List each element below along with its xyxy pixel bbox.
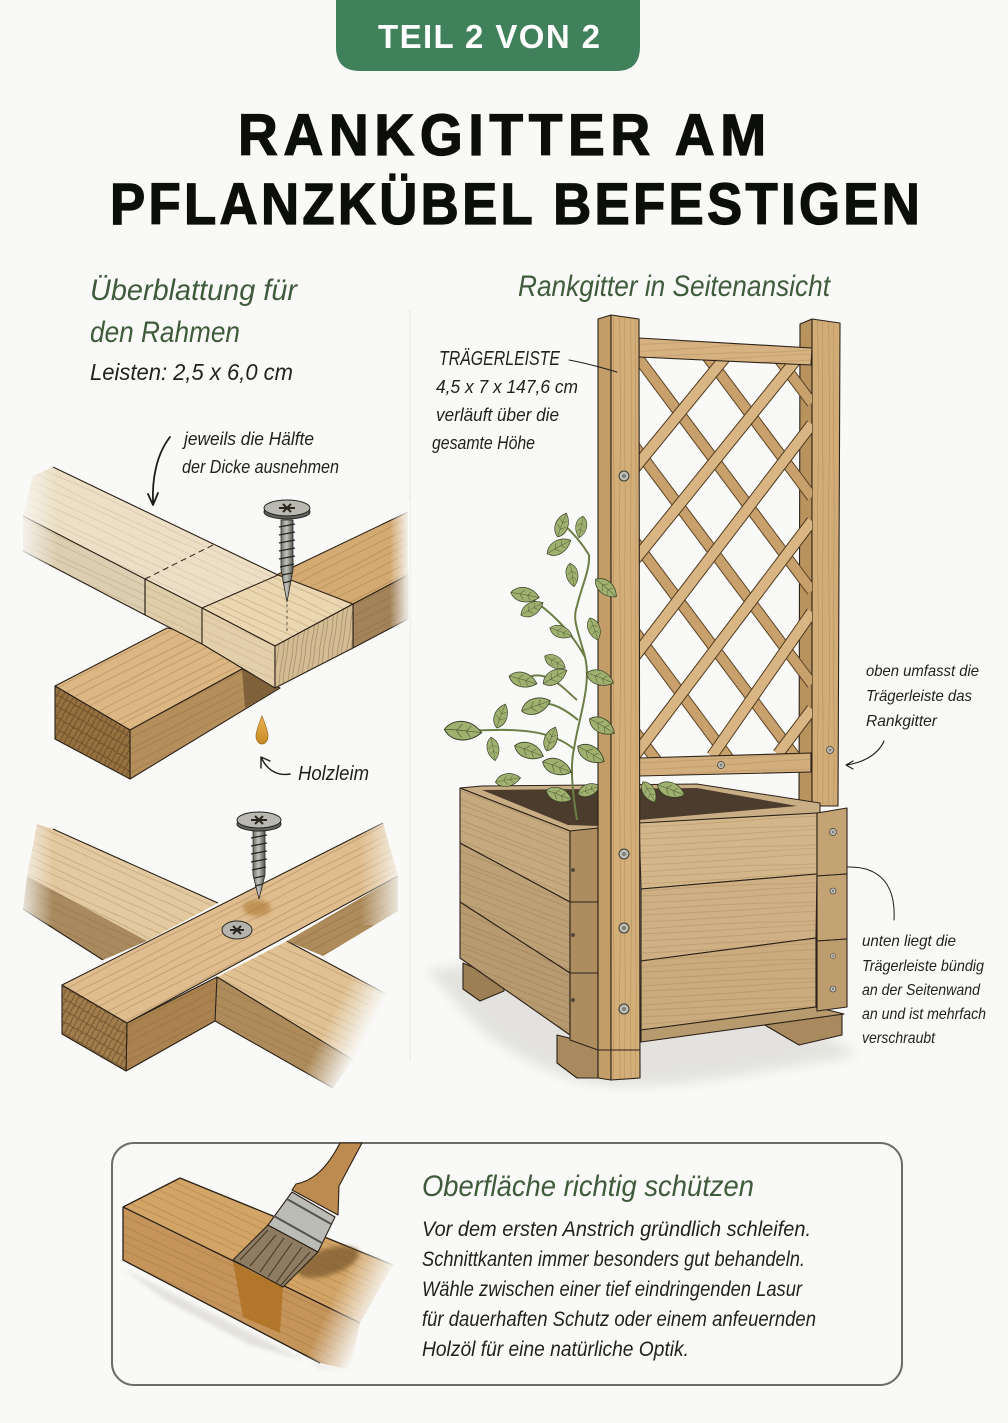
planter front boards [639, 813, 844, 1042]
rim and soil [460, 784, 820, 831]
label: Holzleim: Holzleim [298, 763, 369, 785]
label: unten liegt: an der Seitenwand [862, 982, 981, 999]
panel: surface protection [112, 1143, 902, 1385]
glue drop [256, 716, 268, 744]
brush ferrule [268, 1192, 335, 1252]
badge: Teil 2 von 2 [336, 0, 640, 71]
label: unten liegt [862, 933, 986, 1047]
heading: Rankgitter in Seitenansicht: Rankgitter in Seitenansicht [518, 270, 831, 303]
label: unten liegt: unten liegt die [862, 933, 956, 950]
planter left side [460, 788, 570, 1035]
heading: Überblattung für den Rahmen [90, 274, 298, 349]
planter corner [570, 828, 598, 1050]
label: oben umfasst [866, 663, 979, 730]
text: surface instructions: für dauerhaften Schutz oder einem anfeuernden [422, 1308, 816, 1331]
panel divider [409, 310, 411, 1060]
lower beam [55, 512, 408, 779]
label: unten liegt: an und ist mehrfach [862, 1006, 986, 1023]
beam [123, 1178, 393, 1370]
upper beam with notch [23, 467, 353, 688]
lower right beam [215, 941, 390, 1088]
illustration: planter with trellis [425, 315, 860, 1086]
label: half thickness: jeweils die Hälfte [181, 429, 314, 449]
text: surface instructions [422, 1218, 816, 1361]
label: unten liegt: verschraubt [862, 1030, 935, 1047]
brush shadow [294, 1240, 362, 1284]
arrow: to glue [261, 757, 290, 774]
screw above joint [237, 812, 281, 899]
label: oben umfasst: Trägerleiste das [866, 688, 972, 705]
label: Trägerleiste: TRÄGERLEISTE [439, 348, 561, 370]
heading: Oberfläche richtig schützen: Oberfläche richtig schützen [422, 1170, 754, 1203]
back beam [23, 824, 218, 960]
label: half thickness: der Dicke ausnehmen [182, 457, 339, 477]
end fades [15, 815, 53, 925]
illustration: wood beam with brush [122, 1143, 393, 1372]
arrow: to half-lap notch [148, 437, 170, 505]
right post behind planter [799, 319, 840, 806]
label: Trägerleiste: 4,5 x 7 x 147,6 cm [436, 377, 578, 397]
oil stain [233, 1262, 283, 1333]
lattice [640, 358, 812, 758]
countersunk screw head [222, 921, 252, 939]
title [110, 103, 920, 237]
ground shadow [425, 960, 860, 1086]
label: unten liegt: Trägerleiste bündig [862, 958, 984, 975]
leaves in front of post [574, 574, 621, 768]
label: oben umfasst: oben umfasst die [866, 663, 979, 680]
cross beam [62, 823, 398, 1071]
plant [444, 511, 687, 820]
brush bristles [233, 1225, 318, 1287]
label: Trägerleiste: gesamte Höhe [432, 433, 535, 453]
title: RANKGITTER AM [238, 103, 766, 167]
arrow: leader to lower fastening [847, 867, 894, 920]
text: Leisten dimensions: Leisten: 2,5 x 6,0 cm [90, 359, 293, 385]
text: surface instructions: Holzöl für eine natürliche Optik. [422, 1338, 689, 1361]
heading: Überblattung für den Rahmen: den Rahmen [90, 316, 240, 349]
planter feet [463, 963, 842, 1078]
label: oben umfasst: Rankgitter [866, 713, 938, 730]
left post [598, 315, 640, 1080]
table shadow [122, 1268, 345, 1372]
label: Trägerleiste [432, 348, 578, 453]
bottom rail [639, 753, 811, 776]
planter right corner [817, 808, 847, 1011]
end fades [15, 455, 57, 565]
arrow: to upper fastening [846, 741, 884, 769]
brush handle [292, 1143, 362, 1215]
heading: Überblattung für den Rahmen: Überblattung für [90, 274, 298, 307]
badge: Teil 2 von 2: TEIL 2 VON 2 [378, 18, 600, 55]
top rail [639, 338, 812, 365]
label: half thickness [181, 429, 339, 477]
illustration: assembled joint [15, 812, 407, 1088]
label: Trägerleiste: verläuft über die [436, 405, 559, 425]
text: surface instructions: Vor dem ersten Anstrich gründlich schleifen. [422, 1218, 811, 1241]
arrow: to Trägerleiste [569, 360, 617, 372]
screw above joint [264, 500, 310, 634]
title: PFLANZKÜBEL BEFESTIGEN [110, 172, 920, 237]
text: surface instructions: Wähle zwischen einer tief eindringenden Lasur [422, 1278, 803, 1301]
illustration: half-lap joint open [15, 455, 410, 779]
text: surface instructions: Schnittkanten immer besonders gut behandeln. [422, 1248, 805, 1271]
